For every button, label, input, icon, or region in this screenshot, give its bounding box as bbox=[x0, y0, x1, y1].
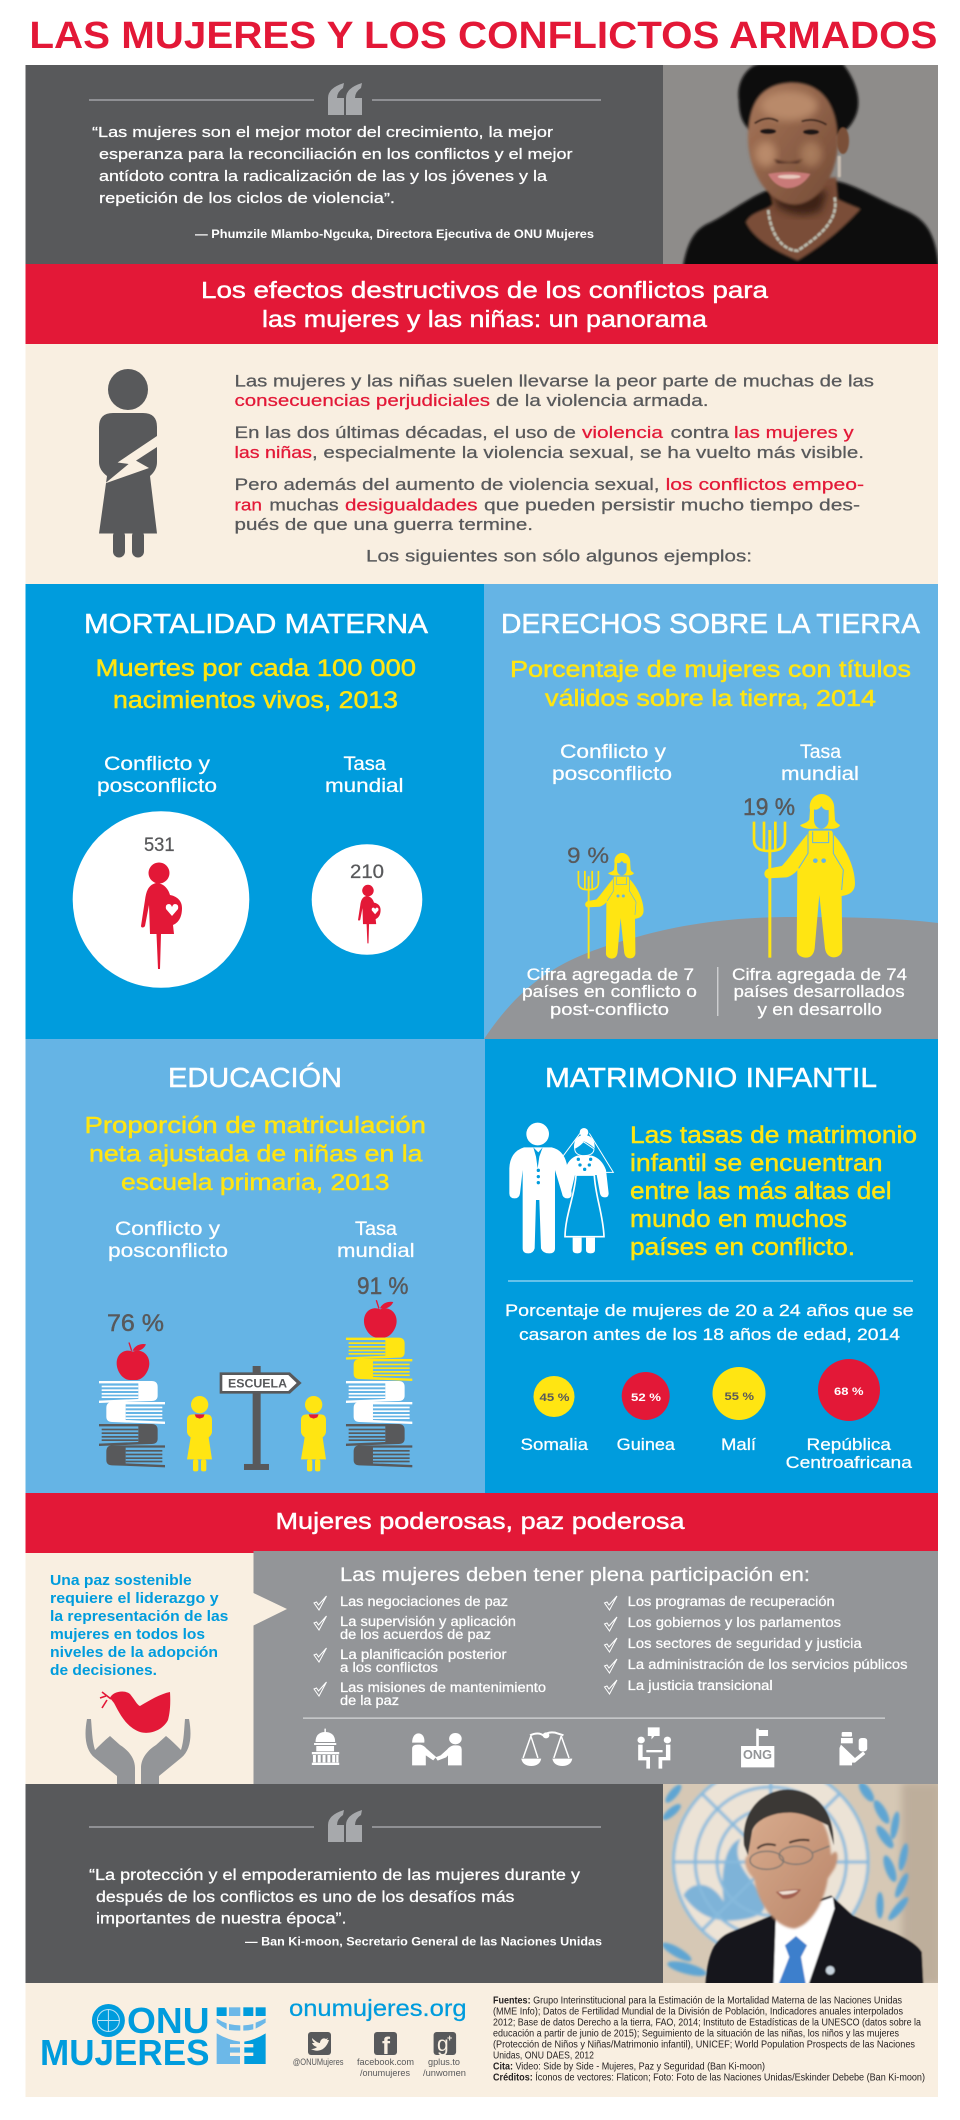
social: Google plus: g bbox=[437, 2033, 449, 2056]
heading: MORTALIDAD MATERNA bbox=[84, 608, 428, 639]
panel: closing quote bbox=[26, 1784, 663, 1983]
icon: school signpost bbox=[220, 1366, 302, 1470]
checklist left: de la paz bbox=[340, 1693, 399, 1708]
intro paragraph 2 bbox=[234, 423, 864, 462]
social: Google plus: /unwomen bbox=[423, 2068, 466, 2078]
sources and credits: Cita: Video: Side by Side - Mujeres, Paz y Seguridad (Ban Ki-moon) bbox=[493, 2062, 765, 2073]
heading: EDUCACIÓN bbox=[168, 1062, 342, 1093]
bubble: Guinea 52 percent bbox=[617, 1372, 676, 1454]
value: 19 percent: 19 % bbox=[743, 794, 795, 821]
intro closing line: Los siguientes son sólo algunos ejemplos: bbox=[366, 546, 752, 566]
social: Twitter: @ONUMujeres bbox=[293, 2057, 344, 2067]
intro paragraph 3 bbox=[234, 475, 864, 534]
checklist right: Los programas de recuperación bbox=[628, 1594, 835, 1609]
logo symbol bbox=[217, 2007, 266, 2064]
icon: person with phone bbox=[839, 1732, 867, 1765]
callout text: de decisiones. bbox=[50, 1663, 157, 1679]
icon: scales of justice bbox=[521, 1732, 572, 1766]
column labels: posconflicto bbox=[97, 776, 217, 797]
column labels: Tasa bbox=[344, 754, 386, 775]
panel: child marriage bbox=[485, 1039, 938, 1493]
ground hill bbox=[484, 917, 938, 1039]
bubble: Somalia 45 percent bbox=[520, 1376, 589, 1454]
intro paragraph 3: los conflictos empeo- bbox=[666, 475, 864, 494]
panel: sustainable peace callout bbox=[26, 1553, 254, 1784]
icon: ONG building bbox=[741, 1729, 774, 1767]
checklist left: Las negociaciones de paz bbox=[340, 1594, 508, 1609]
social: Google plus: gplus.to bbox=[428, 2057, 460, 2067]
panel: education bbox=[26, 1039, 485, 1493]
banner: powerful women: Mujeres poderosas, paz poderosa bbox=[276, 1508, 686, 1534]
icon: dove bbox=[100, 1691, 170, 1733]
subheading: Proporción de matriculación bbox=[84, 1112, 426, 1138]
caption: developed and developing countries: Cifra agregada de 74 bbox=[732, 966, 907, 984]
column labels: mundial bbox=[337, 1241, 415, 1262]
logo: ONU Mujeres bbox=[40, 2000, 266, 2073]
quote text bbox=[89, 1867, 580, 1928]
statement bbox=[630, 1122, 917, 1261]
quote text: “La protección y el empoderamiento de las mujeres durante y bbox=[89, 1867, 580, 1884]
bubble: Somalia 45 percent: Somalia bbox=[520, 1435, 589, 1454]
quote text: antídoto contra la radicalización de las y los jóvenes y la bbox=[99, 169, 548, 185]
statement: países en conflicto. bbox=[630, 1234, 855, 1261]
chart description: Porcentaje de mujeres de 20 a 24 años que se bbox=[505, 1301, 914, 1320]
sources and credits: Fuentes: Grupo Interinstitucional para la Estimación de la Mortalidad Materna de las Naciones Unidas bbox=[493, 1996, 902, 2007]
social: Facebook bbox=[357, 2032, 414, 2078]
school illustration bbox=[99, 1300, 412, 1471]
checklist left: de los acuerdos de paz bbox=[340, 1627, 491, 1642]
callout text: niveles de la adopción bbox=[50, 1645, 218, 1661]
subheading: escuela primaria, 2013 bbox=[121, 1169, 390, 1195]
checklist left: La supervisión y aplicación bbox=[340, 1614, 516, 1629]
intro paragraph 2: En las dos últimas décadas, el uso de bbox=[234, 423, 576, 442]
intro paragraph 2: , especialmente la violencia sexual, se ha vuelto más visible. bbox=[312, 443, 864, 462]
checklist right: La justicia transicional bbox=[628, 1678, 773, 1693]
icon: left hand bbox=[86, 1719, 135, 1784]
sources and credits: (Protección de Niños y Niñas/Matrimonio infantil), UNICEF; World Population Prospects de las Naciones bbox=[493, 2040, 915, 2051]
chart description bbox=[505, 1301, 914, 1344]
pointer arrow bbox=[254, 1593, 287, 1626]
quote ornament bbox=[89, 83, 601, 115]
column labels: mundial bbox=[781, 764, 859, 785]
column labels bbox=[97, 754, 404, 797]
icon: meeting bbox=[637, 1727, 671, 1769]
bubble: 531 conflict: 531 bbox=[144, 835, 174, 856]
intro paragraph 2: las mujeres y bbox=[734, 423, 854, 442]
checklist right bbox=[604, 1594, 908, 1694]
bubble: Central African Republic 68 percent: 68 % bbox=[834, 1386, 864, 1398]
heading: MATRIMONIO INFANTIL bbox=[545, 1062, 877, 1093]
caption: conflict countries bbox=[522, 966, 697, 1019]
callout text: mujeres en todos los bbox=[50, 1627, 205, 1643]
intro paragraph 3: pués de que una guerra termine. bbox=[234, 515, 533, 534]
chart description: casaron antes de los 18 años de edad, 2014 bbox=[519, 1325, 900, 1344]
bubble: Central African Republic 68 percent: República bbox=[806, 1435, 892, 1454]
subheading bbox=[510, 656, 911, 711]
icon: girl left bbox=[187, 1396, 212, 1471]
intro paragraph 3: ran bbox=[234, 496, 262, 514]
intro paragraph 1: de la violencia armada. bbox=[496, 391, 708, 410]
column labels: posconflicto bbox=[552, 764, 672, 785]
sources and credits: 2012; Base de datos Derecho a la tierra, FAO, 2014; Instituto de Estadísticas de la UNESCO (datos sobre la bbox=[493, 2018, 921, 2029]
callout text bbox=[50, 1573, 228, 1679]
title: LAS MUJERES Y LOS CONFLICTOS ARMADOS bbox=[29, 15, 937, 57]
quote text: importantes de nuestra época”. bbox=[96, 1911, 347, 1928]
bubble: Central African Republic 68 percent: Centroafricana bbox=[786, 1453, 913, 1472]
quote text: repetición de los ciclos de violencia”. bbox=[99, 191, 395, 207]
column labels: mundial bbox=[325, 776, 404, 797]
callout text: requiere el liderazgo y bbox=[50, 1591, 219, 1607]
intro paragraph 1: Las mujeres y las niñas suelen llevarse la peor parte de muchas de las bbox=[234, 372, 874, 390]
statement: Las tasas de matrimonio bbox=[630, 1122, 917, 1149]
social: Facebook: facebook.com bbox=[357, 2057, 414, 2067]
photo: Phumzile Mlambo-Ngcuka bbox=[663, 64, 939, 267]
panel: land rights bbox=[484, 584, 938, 1039]
book stack: conflict bbox=[99, 1342, 165, 1467]
bubble: Mali 55 percent: 55 % bbox=[724, 1391, 754, 1403]
website: onumujeres.org bbox=[289, 1995, 467, 2021]
checklist right: Los gobiernos y los parlamentos bbox=[628, 1615, 841, 1630]
subheading bbox=[84, 1112, 426, 1195]
sources and credits: Créditos: Íconos de vectores: Flaticon; Foto: Foto de las Naciones Unidas/Eskinder Debebe (Ban Ki-moon) bbox=[493, 2073, 925, 2084]
banner: destructive effects: Los efectos destructivos de los conflictos para bbox=[201, 277, 769, 303]
caption: developed and developing countries: y en desarrollo bbox=[758, 1001, 882, 1019]
statement: infantil se encuentran bbox=[630, 1150, 882, 1177]
bubble: 210 world: 210 bbox=[350, 862, 384, 883]
caption: conflict countries: países en conflicto o bbox=[522, 983, 697, 1001]
icon: bride and groom bbox=[509, 1123, 613, 1253]
icon: farmer small, 9 percent bbox=[578, 853, 644, 959]
quote text bbox=[92, 125, 573, 207]
icon: farmer large, 19 percent bbox=[754, 794, 855, 958]
social: Facebook: /onumujeres bbox=[360, 2068, 410, 2078]
sources and credits: (MME Info); Datos de Fertilidad Mundial de la División de Población, Indicadores anuales interpolados bbox=[493, 2007, 903, 2018]
social: Twitter bbox=[293, 2032, 344, 2067]
icon: woman with lightning bolt bbox=[99, 369, 157, 558]
subheading: nacimientos vivos, 2013 bbox=[113, 687, 398, 714]
UN emblem bbox=[92, 2004, 125, 2037]
panel: introduction bbox=[26, 344, 938, 584]
bubble: 210 world bbox=[312, 844, 422, 955]
social: Google plus bbox=[423, 2032, 466, 2078]
callout text: la representación de las bbox=[50, 1609, 228, 1625]
bubble: Somalia 45 percent: 45 % bbox=[540, 1392, 570, 1404]
quote attribution: — Ban Ki-moon, Secretario General de las Naciones Unidas bbox=[245, 1935, 602, 1949]
column labels bbox=[108, 1219, 415, 1262]
book stack: world bbox=[346, 1300, 412, 1467]
subheading: neta ajustada de niñas en la bbox=[89, 1141, 424, 1167]
ONG label: ONG bbox=[743, 1748, 772, 1762]
column labels bbox=[552, 742, 859, 785]
checklist left bbox=[314, 1594, 546, 1708]
checklist right: La administración de los servicios públicos bbox=[628, 1657, 908, 1672]
heading: DERECHOS SOBRE LA TIERRA bbox=[501, 608, 920, 639]
intro paragraph 3: que pueden persistir mucho tiempo des- bbox=[484, 496, 860, 514]
checklist right: Los sectores de seguridad y justicia bbox=[628, 1636, 862, 1651]
callout text: Una paz sostenible bbox=[50, 1573, 192, 1589]
icon: capitol bbox=[312, 1729, 339, 1765]
sources and credits: educación a partir de junio de 2015); Seguimiento de la situación de las niñas, los niños y las mujeres bbox=[493, 2029, 899, 2040]
subheading bbox=[96, 655, 416, 714]
caption: conflict countries: post-conflicto bbox=[550, 1001, 669, 1019]
quote text: esperanza para la reconciliación en los conflictos y el mejor bbox=[99, 147, 573, 163]
column labels: Conflicto y bbox=[104, 754, 211, 775]
sources and credits bbox=[493, 1996, 925, 2084]
value: 9 percent: 9 % bbox=[567, 843, 609, 868]
banner: powerful women bbox=[26, 1493, 938, 1553]
caption: developed and developing countries: países desarrollados bbox=[734, 983, 905, 1001]
intro paragraph 2: violencia bbox=[582, 423, 664, 442]
intro paragraph 2: contra bbox=[670, 423, 730, 442]
column labels: posconflicto bbox=[108, 1241, 228, 1262]
intro paragraph 3: muchas bbox=[269, 496, 339, 514]
bubble: Guinea 52 percent: 52 % bbox=[631, 1392, 661, 1404]
subheading: válidos sobre la tierra, 2014 bbox=[545, 685, 876, 711]
banner: destructive effects: las mujeres y las niñas: un panorama bbox=[262, 306, 708, 332]
icon: girl right bbox=[301, 1396, 326, 1471]
quote text: después de los conflictos es uno de los desafíos más bbox=[96, 1889, 515, 1906]
intro paragraph 3: desigualdades bbox=[345, 496, 478, 514]
icon: handshake bbox=[412, 1733, 462, 1765]
banner: destructive effects bbox=[26, 264, 938, 344]
sign label: ESCUELA bbox=[228, 1376, 287, 1390]
intro paragraph 1: consecuencias perjudiciales bbox=[234, 391, 490, 410]
value: 76 percent: 76 % bbox=[107, 1310, 164, 1337]
heading: Las mujeres deben tener plena participación en: bbox=[340, 1564, 810, 1586]
icon: right hand bbox=[141, 1719, 190, 1784]
column labels: Tasa bbox=[800, 742, 841, 763]
social: Google plus: + bbox=[447, 2033, 452, 2043]
bubble: Guinea 52 percent: Guinea bbox=[617, 1435, 676, 1454]
icon: small pregnant woman bbox=[358, 885, 381, 943]
icon: pregnant woman bbox=[141, 862, 182, 969]
checklist left: a los conflictos bbox=[340, 1660, 438, 1675]
panel: participation bbox=[254, 1551, 938, 1784]
panel: maternal mortality bbox=[26, 584, 484, 1039]
intro paragraph 3: Pero además del aumento de violencia sexual, bbox=[234, 475, 660, 494]
quote ornament bbox=[89, 1810, 601, 1842]
sources and credits: Unidas, ONU DAES, 2012 bbox=[493, 2051, 594, 2062]
statement: mundo en muchos bbox=[630, 1206, 847, 1233]
icon row bbox=[312, 1727, 867, 1769]
bubble: Central African Republic 68 percent bbox=[786, 1359, 913, 1472]
caption: conflict countries: Cifra agregada de 7 bbox=[527, 966, 694, 984]
bubble: Mali 55 percent: Malí bbox=[721, 1435, 756, 1454]
column labels: Conflicto y bbox=[115, 1219, 221, 1240]
value: 91 percent: 91 % bbox=[357, 1273, 408, 1300]
photo: Ban Ki-moon bbox=[663, 1784, 938, 1983]
statement: entre las más altas del bbox=[630, 1178, 892, 1205]
caption: developed and developing countries bbox=[732, 966, 907, 1019]
intro paragraph 2: las niñas bbox=[234, 443, 312, 462]
bubble: Mali 55 percent bbox=[712, 1367, 766, 1454]
column labels: Conflicto y bbox=[560, 742, 667, 763]
bubble: 531 conflict bbox=[73, 811, 249, 988]
quote attribution: — Phumzile Mlambo-Ngcuka, Directora Ejecutiva de ONU Mujeres bbox=[195, 229, 594, 241]
subheading: Muertes por cada 100 000 bbox=[96, 655, 416, 682]
intro paragraph 1 bbox=[234, 372, 874, 410]
subheading: Porcentaje de mujeres con títulos bbox=[510, 656, 911, 682]
panel: opening quote bbox=[26, 65, 664, 264]
checklist left: Las misiones de mantenimiento bbox=[340, 1680, 546, 1695]
footer bbox=[26, 1983, 938, 2097]
social: Facebook: f bbox=[382, 2033, 391, 2060]
checklist left: La planificación posterior bbox=[340, 1647, 507, 1662]
logo: ONU Mujeres: MUJERES bbox=[40, 2032, 210, 2073]
logo: ONU Mujeres: ONU bbox=[127, 2000, 210, 2041]
quote text: “Las mujeres son el mejor motor del crecimiento, la mejor bbox=[92, 125, 553, 141]
column labels: Tasa bbox=[355, 1219, 397, 1240]
